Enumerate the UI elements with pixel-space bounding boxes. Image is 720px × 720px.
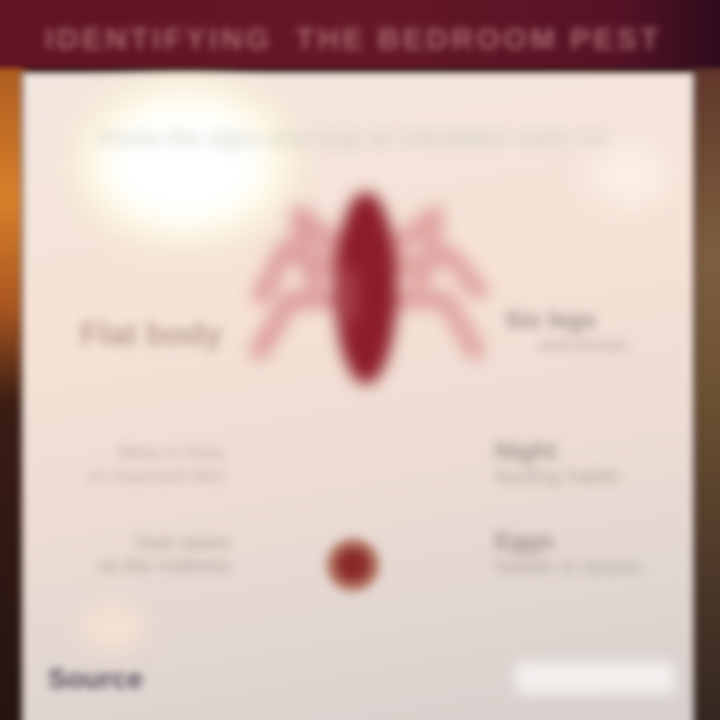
icon: red dot — [320, 532, 386, 598]
icon: insect illustration — [243, 180, 494, 396]
left label 3 — [99, 533, 230, 577]
bottom left warm spot — [80, 605, 145, 650]
footer source label: Source — [48, 663, 143, 694]
right label 2: feeding habits — [495, 466, 620, 488]
insect right legs — [390, 215, 478, 350]
header title: IDENTIFYING THE BEDROOM PEST — [45, 23, 662, 56]
top right glow — [590, 145, 670, 205]
left label 3: Dark stains — [135, 533, 230, 554]
left label 1: Flat body — [80, 316, 222, 352]
right label 1 — [502, 306, 629, 357]
insect body highlight — [343, 263, 357, 327]
left edge strip — [0, 50, 24, 720]
right label 2 — [491, 438, 620, 488]
left label 3: on the mattress — [99, 556, 230, 577]
left label 2: on exposed skin — [88, 466, 225, 487]
right edge strip — [694, 50, 720, 720]
right label 2: Night — [495, 438, 556, 465]
right label 3: Eggs — [495, 528, 554, 555]
right label 3 — [491, 528, 640, 578]
left label 2 — [88, 443, 225, 487]
insect left legs — [260, 215, 340, 350]
right label 1: red-brown — [539, 335, 629, 357]
insect body — [335, 192, 397, 384]
header bar — [0, 0, 720, 68]
left label 2: Bites in lines — [118, 443, 225, 464]
footer button — [515, 662, 675, 694]
right label 3: hidden in seams — [495, 556, 640, 578]
glow highlight — [75, 80, 295, 245]
